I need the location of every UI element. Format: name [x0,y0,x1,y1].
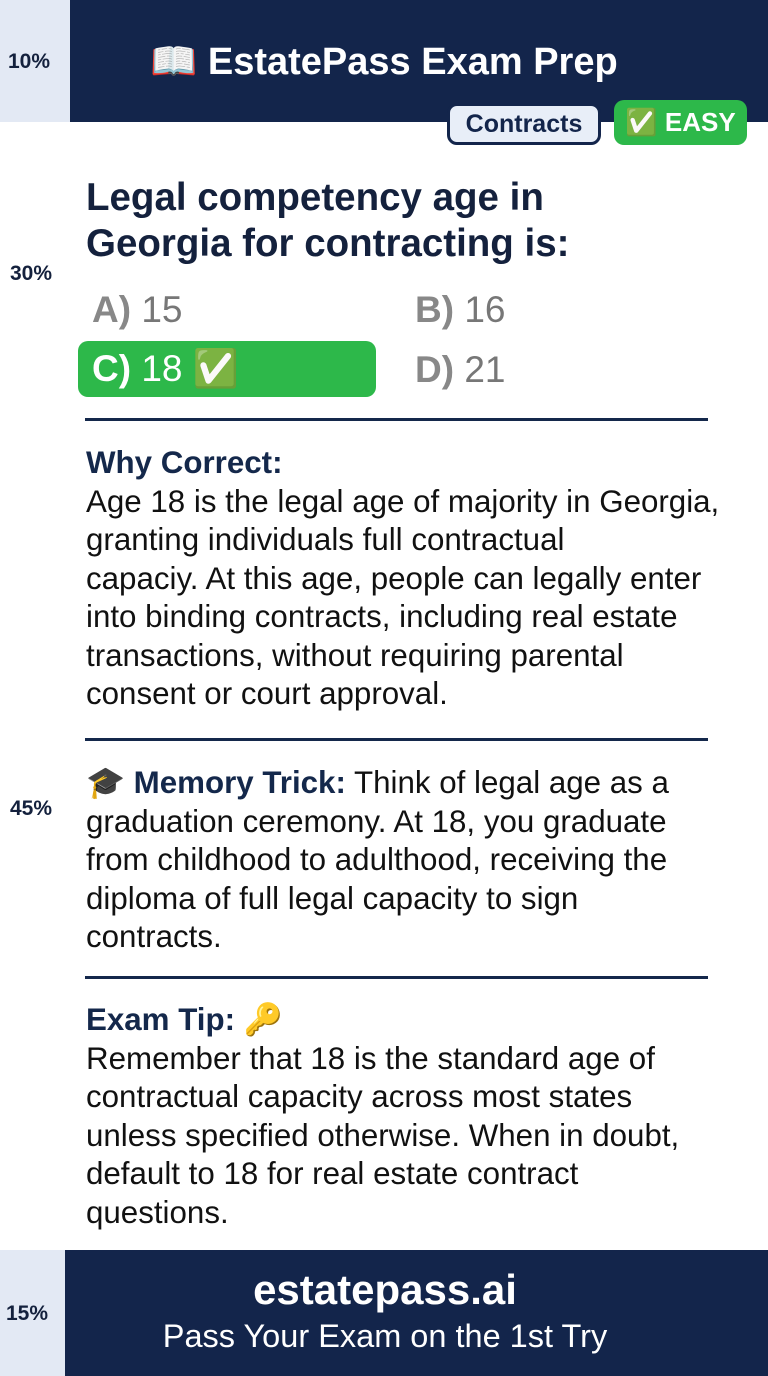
label: 45%: 45% [10,797,52,820]
question title [86,176,569,265]
exam tip: Remember that 18 is the standard age of [86,1040,655,1076]
option A: A) 15 [92,289,182,330]
badge: Contracts: Contracts [466,110,582,138]
why correct [86,445,719,711]
why correct: consent or court approval. [86,676,448,711]
left strip: footer [0,1250,65,1376]
why correct: granting individuals full contractual [86,522,564,557]
why correct: transactions, without requiring parental [86,638,624,672]
label: 30%: 30% [10,262,52,285]
memory trick: diploma of full legal capacity to sign [86,880,578,916]
label: 15%: 15% [6,1302,48,1325]
footer band [65,1250,768,1376]
left strip: header [0,0,70,122]
badge: EASY: ✅ EASY [625,107,736,137]
question title: Georgia for contracting is: [86,222,569,265]
footer site: estatepass.ai [253,1266,517,1313]
why correct: Age 18 is the legal age of majority in Georgia, [86,484,719,518]
exam tip [86,1002,679,1230]
option C correct [78,341,376,397]
option D: D) 21 [415,349,505,390]
exam tip: Exam Tip: 🔑 [86,1002,283,1037]
exam tip: questions. [86,1194,229,1230]
label: 10%: 10% [8,50,50,73]
memory trick: from childhood to adulthood, receiving the [86,842,667,877]
option B: B) 16 [415,289,505,330]
option C correct: C) 18 ✅ [92,348,239,389]
header title: 📖 EstatePass Exam Prep [150,41,618,83]
badge: Contracts [447,103,601,145]
exam tip: default to 18 for real estate contract [86,1156,578,1191]
memory trick: contracts. [86,919,222,954]
memory trick: graduation ceremony. At 18, you graduate [86,804,667,838]
badge: EASY [614,100,747,145]
why correct: Why Correct: [86,445,282,480]
memory trick: 🎓 Memory Trick: Think of legal age as a [86,765,669,800]
header band [70,0,768,122]
why correct: capaciy. At this age, people can legally enter [86,560,701,596]
why correct: into binding contracts, including real estate [86,599,678,634]
footer tagline: Pass Your Exam on the 1st Try [163,1318,607,1354]
exam tip: unless specified otherwise. When in doubt, [86,1118,679,1152]
memory trick [86,765,669,954]
question title: Legal competency age in [86,176,544,219]
exam tip: contractual capacity across most states [86,1079,632,1114]
